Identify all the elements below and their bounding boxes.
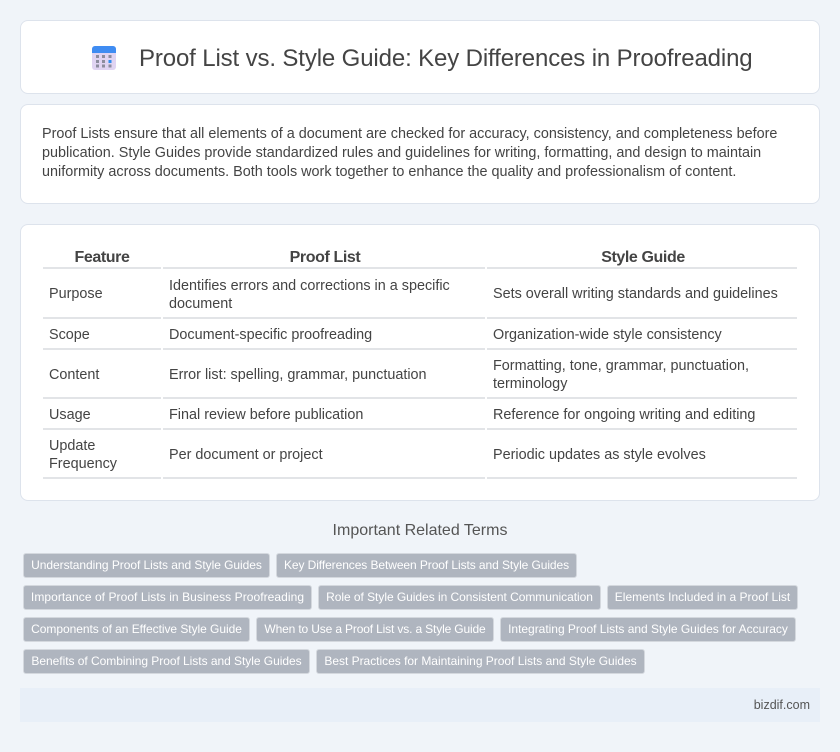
row: update frequency: Periodic updates as style evolves [493,447,706,463]
panel: header [20,20,820,94]
intro text: publication. Style Guides provide standardized rules and guidelines for writing, formatting, and design to maintain [42,145,761,161]
related terms tags: Key Differences Between Proof Lists and Style Guides [284,558,569,572]
related terms tags: Importance of Proof Lists in Business Proofreading [31,590,304,604]
related terms tags [23,553,798,674]
row: content: Formatting, tone, grammar, punctuation, [493,358,749,374]
row: usage: Reference for ongoing writing and editing [493,407,755,423]
row: usage [49,407,755,423]
row: content: Error list: spelling, grammar, punctuation [169,367,427,383]
row: usage: Final review before publication [169,407,363,423]
related terms tags: When to Use a Proof List vs. a Style Guide [264,622,486,636]
related terms tags: Role of Style Guides in Consistent Communication [326,590,593,604]
related terms tags: Understanding Proof Lists and Style Guides [31,558,262,572]
intro text: Proof Lists ensure that all elements of a document are checked for accuracy, consistency, and completeness before [42,126,777,142]
intro text [42,126,777,180]
row: purpose: Identifies errors and corrections in a specific [169,278,450,294]
row: content: terminology [493,376,567,392]
related terms tags: Elements Included in a Proof List [615,590,790,604]
row: scope [49,327,722,343]
footer source: bizdif.com [754,698,810,712]
table header: Style Guide [601,249,685,266]
row: update frequency: Frequency [49,456,117,472]
row: update frequency [49,438,706,472]
table header: Proof List [290,249,360,266]
related terms tags: Integrating Proof Lists and Style Guides for Accuracy [508,622,788,636]
panel: comparison table [20,224,820,501]
related terms tags: Best Practices for Maintaining Proof Lists and Style Guides [324,654,637,668]
row: usage: Usage [49,407,91,423]
table header [74,249,685,266]
related terms tags: Components of an Effective Style Guide [31,622,242,636]
row: content: Content [49,367,99,383]
intro text: uniformity across documents. Both tools work together to enhance the quality and professionalism of content. [42,164,736,180]
row: update frequency: Update [49,438,95,454]
row: update frequency: Per document or project [169,447,323,463]
icon: calendar [92,46,116,70]
row: purpose: Sets overall writing standards and guidelines [493,286,778,302]
row: purpose: Purpose [49,286,103,302]
row: purpose: document [169,296,232,312]
heading: related terms: Important Related Terms [333,522,507,539]
row: scope: Scope [49,327,90,343]
row: content [49,358,749,392]
footer bar [20,688,820,722]
title: Proof List vs. Style Guide: Key Differences in Proofreading [139,45,753,72]
panel: introduction [20,104,820,204]
row: purpose [49,278,778,312]
related terms tags: Benefits of Combining Proof Lists and Style Guides [31,654,302,668]
table header: Feature [74,249,130,266]
row: scope: Organization-wide style consistency [493,327,722,343]
row: scope: Document-specific proofreading [169,327,372,343]
